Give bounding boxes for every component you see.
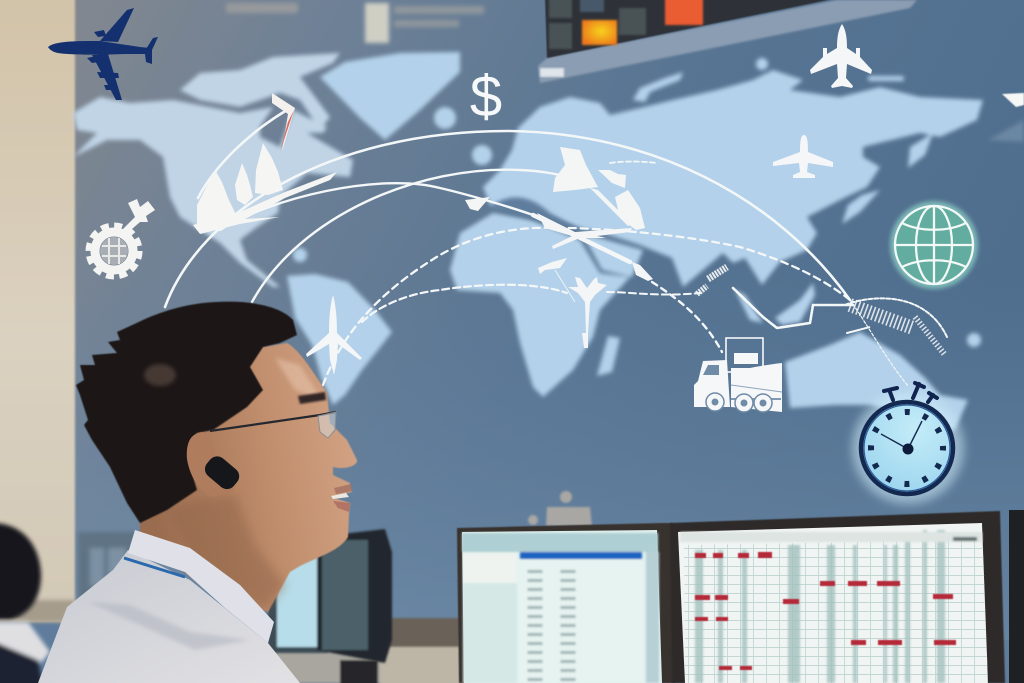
arrow arc [198, 110, 287, 198]
australia [785, 332, 968, 432]
icon: navy airplane [48, 8, 158, 100]
japan and sakhalin [842, 133, 933, 224]
clock hands [881, 421, 922, 449]
south america [287, 274, 392, 405]
white blob at right edge [1002, 93, 1024, 107]
clock ticks [871, 412, 943, 484]
third arc [220, 183, 533, 230]
upper dashed arc [323, 228, 850, 385]
glasses [210, 412, 336, 438]
island route scribble [733, 288, 853, 328]
icon: central diagonal plane [537, 213, 653, 281]
red flagged cells [695, 552, 956, 670]
icon: white plane top right [810, 24, 872, 88]
status lights [549, 0, 703, 49]
hair crown highlight [144, 364, 176, 386]
world map continents [73, 52, 983, 432]
icon: globe [890, 201, 978, 289]
spreadsheet columns [680, 530, 982, 683]
spreadsheet grid [684, 540, 988, 683]
forehead highlight [275, 358, 322, 400]
beige wall column [0, 0, 75, 622]
arrow head with red tail [272, 93, 295, 152]
africa [450, 213, 630, 397]
small label under board [540, 68, 564, 77]
northern island strip [633, 72, 683, 102]
neck and face [140, 343, 357, 612]
ear [187, 432, 235, 497]
third arc thick end [533, 215, 630, 262]
route arcs [165, 110, 947, 386]
second arc dashed end [610, 162, 657, 163]
shirt body [38, 550, 300, 683]
neck shadow [170, 495, 285, 610]
blurred top sign [226, 3, 484, 43]
shirt shadow folds [88, 602, 250, 650]
small scribble [847, 327, 870, 333]
arc tail to stopwatch [850, 300, 908, 386]
branch to truck [652, 282, 722, 352]
desk strip under screen [270, 618, 465, 683]
icon: dollar sign: $ [470, 64, 502, 129]
hatched route [850, 305, 913, 328]
icon: delivery truck [694, 338, 782, 412]
background colleague [0, 523, 50, 683]
top status board [538, 0, 917, 83]
icon: asia cargo scribble [465, 147, 645, 274]
right dashed loop [845, 298, 947, 337]
background monitors left [0, 532, 138, 622]
monitor behind operator [268, 529, 392, 663]
mouth [331, 493, 349, 499]
far right monitor edge [1009, 510, 1024, 683]
arctic islands [180, 53, 340, 130]
blurred object above monitors [528, 491, 592, 526]
center monitor [457, 523, 675, 683]
shirt collar [128, 530, 274, 643]
mediterranean sea [490, 197, 582, 231]
solid long arc [165, 131, 850, 307]
hair [76, 302, 297, 523]
arabia [582, 233, 643, 277]
europe and asia [483, 70, 983, 287]
lower dashed arc [362, 285, 567, 322]
icon: white plane over south america [306, 295, 362, 375]
icon: small plane over africa [555, 270, 607, 348]
icon: gear and key [88, 199, 155, 276]
second solid arc [252, 170, 575, 302]
scribble patches [708, 267, 727, 279]
icon: stopwatch [852, 383, 964, 504]
icon: forest trees [193, 143, 337, 234]
southeast asia islands [735, 283, 815, 325]
greenland [320, 52, 460, 140]
eyebrow [298, 392, 326, 404]
madagascar [597, 336, 620, 376]
north america [73, 97, 353, 287]
small islands [967, 333, 981, 347]
dim land at right edge [988, 120, 1024, 142]
icon: white plane mid right [773, 135, 833, 178]
lanyard [124, 558, 185, 577]
earbud [201, 453, 243, 493]
lower dashed arc east part [607, 292, 700, 295]
operator [38, 302, 357, 683]
loop hatch [915, 317, 945, 355]
right monitor [670, 511, 1005, 683]
